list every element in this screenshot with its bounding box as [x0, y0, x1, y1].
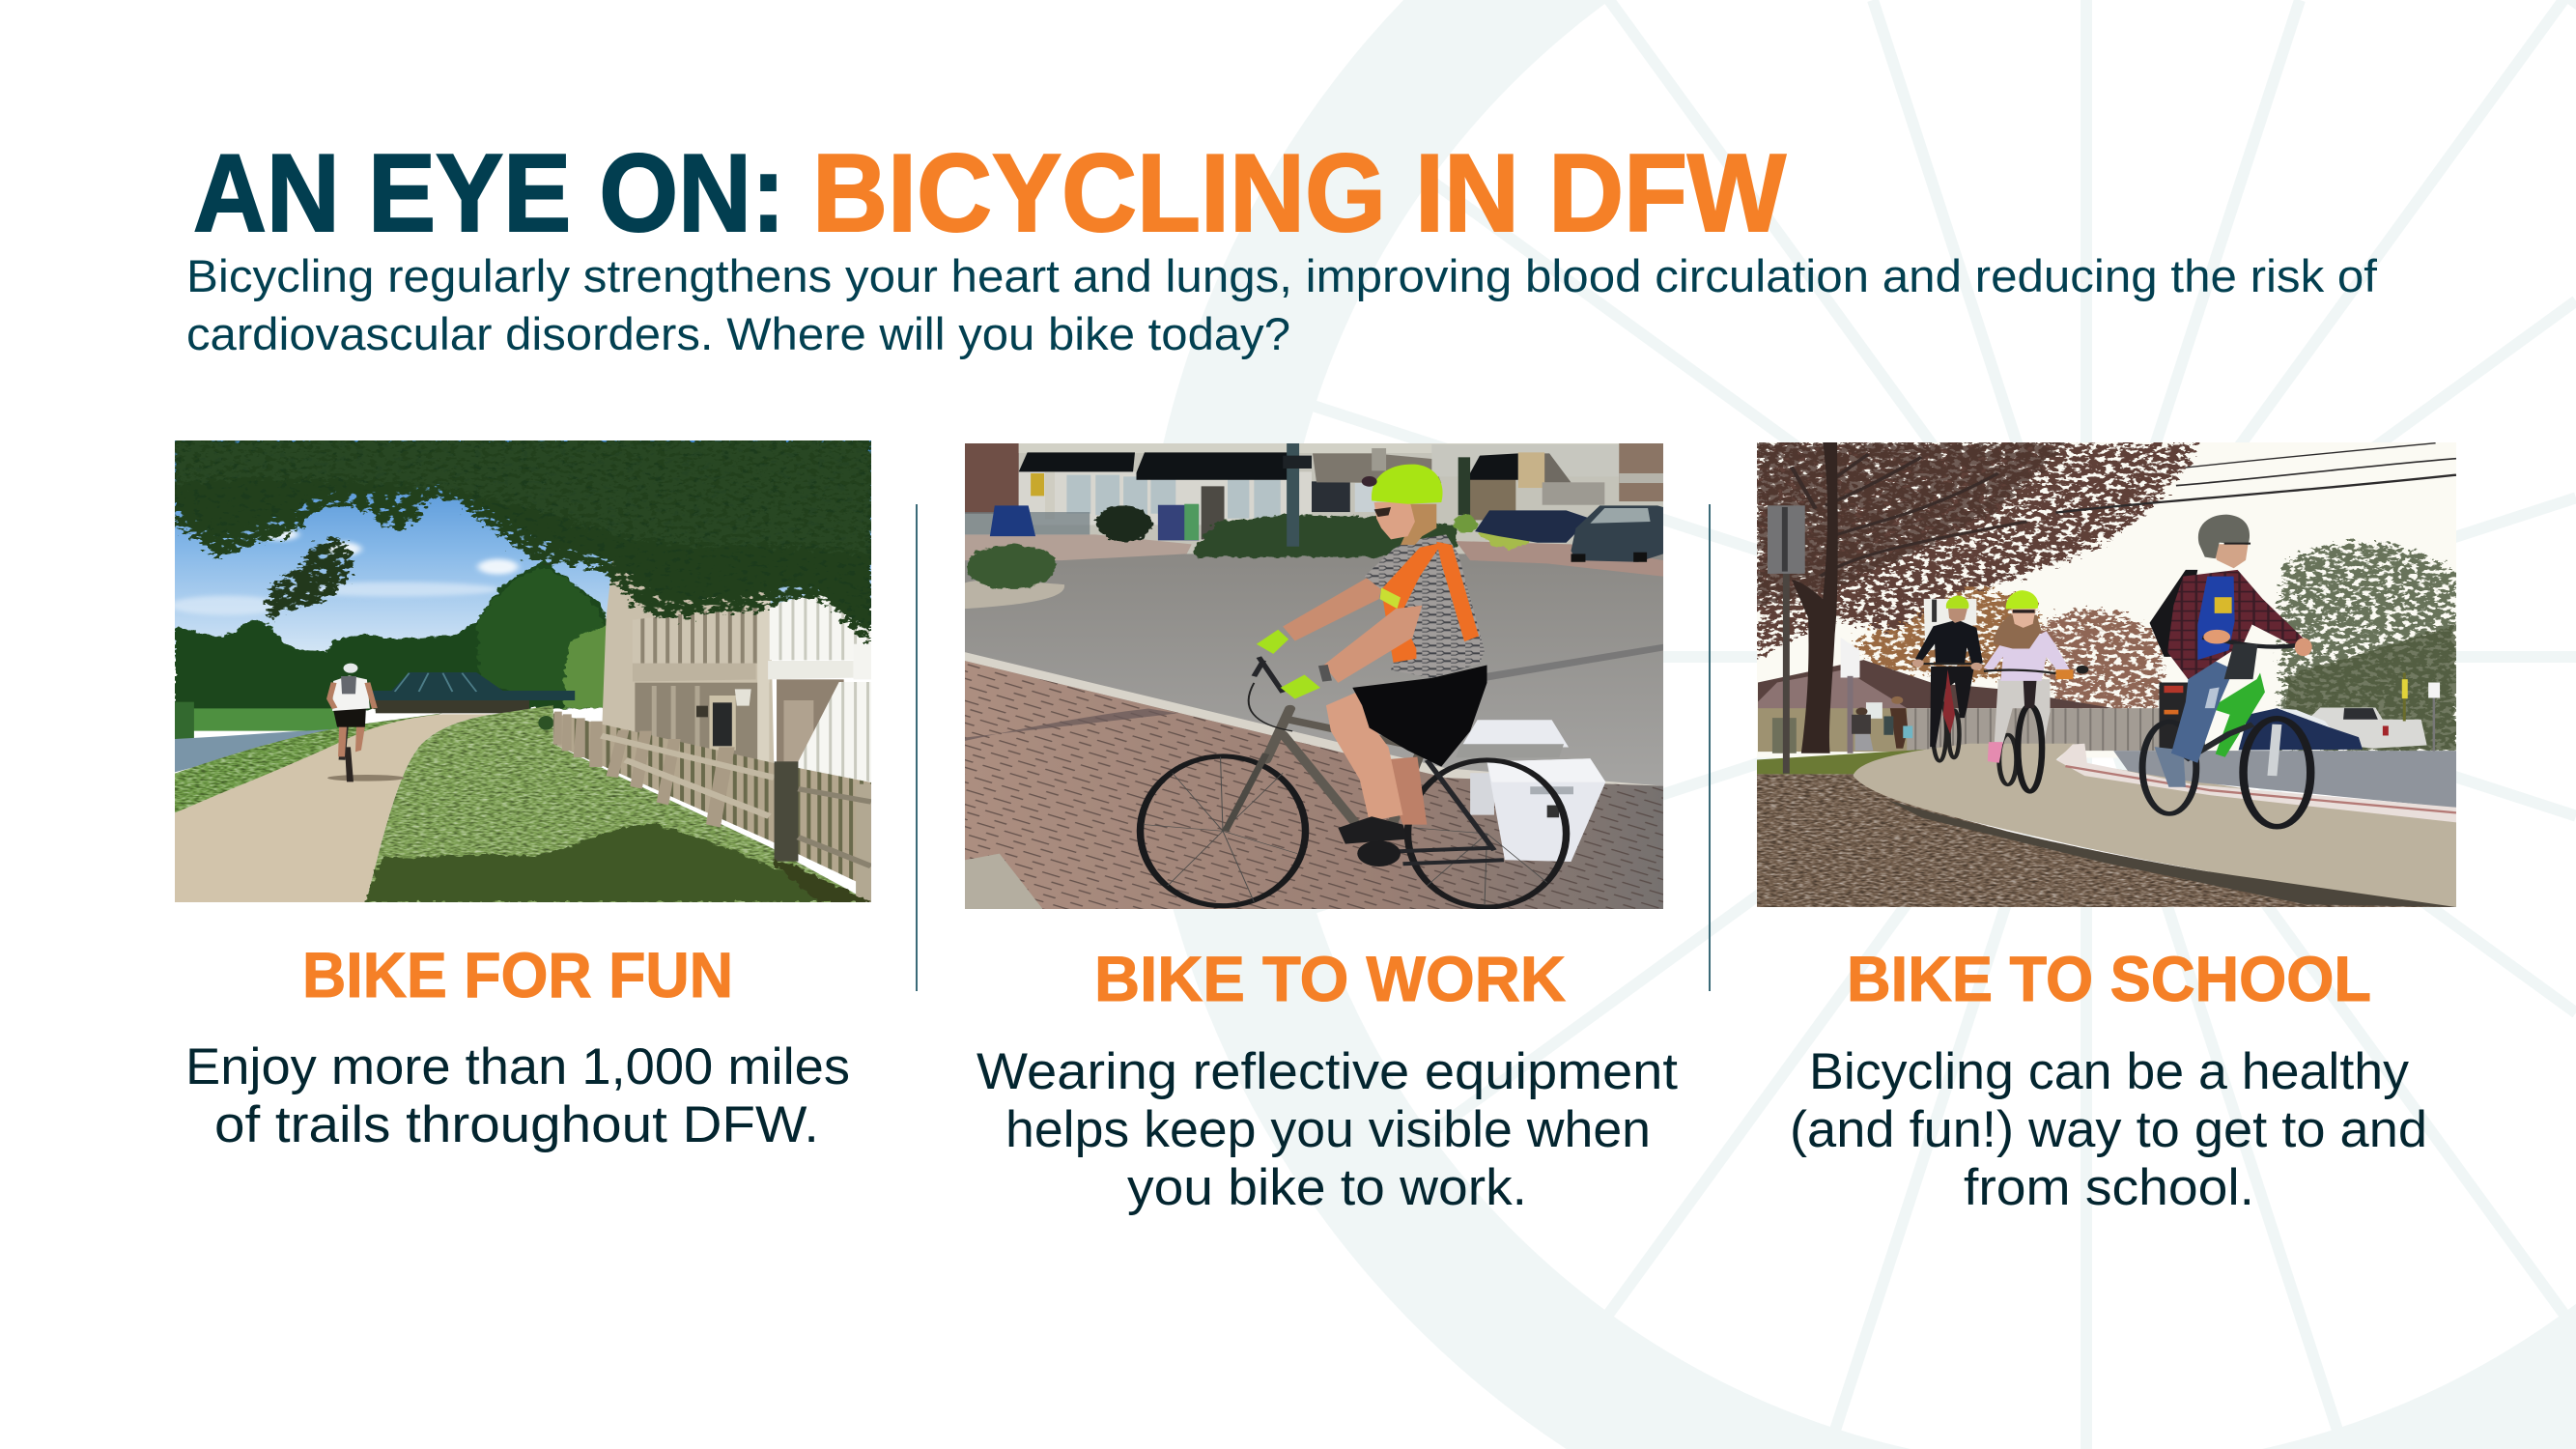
- sub-element: adult rider: [1911, 596, 1983, 761]
- panel: bike for fun: [185, 939, 850, 1153]
- body: bike to work: Wearing reflective equipment: [977, 1043, 1678, 1100]
- divider right: [1709, 504, 1711, 991]
- sub-element: rider on trail: [327, 664, 405, 781]
- heading: bike to work: BIKE TO WORK: [1094, 943, 1566, 1014]
- divider left: [916, 504, 918, 991]
- sub-element: bicycle: [1140, 657, 1567, 907]
- photo: family biking to school: [1757, 442, 2456, 907]
- sub-element: distant pedestrians: [1852, 696, 1912, 751]
- heading: bike to school: BIKE TO SCHOOL: [1847, 943, 2371, 1014]
- title: AN EYE ON:: [193, 132, 785, 255]
- sub-element: girl rider: [1984, 590, 2088, 791]
- intro text: Bicycling regularly strengthens your heart and lungs, improving blood circulation and reducing the risk of: [186, 250, 2378, 301]
- body: bike to school: Bicycling can be a healthy: [1809, 1043, 2410, 1100]
- sub-element: street signs: [1768, 505, 1976, 774]
- body: bike to school: from school.: [1964, 1159, 2254, 1216]
- title: [193, 132, 1786, 255]
- photo: commuter on bike in downtown street: [965, 443, 1663, 909]
- photo: cyclist on riverside trail: [175, 440, 871, 902]
- body: bike to school: [1790, 1043, 2427, 1216]
- body: bike to school: (and fun!) way to get to and: [1790, 1101, 2427, 1158]
- panel: bike to work: [977, 943, 1678, 1216]
- body: bike for fun: [185, 1038, 850, 1153]
- heading: bike for fun: BIKE FOR FUN: [302, 939, 733, 1010]
- sub-element: rear cargo boxes: [1456, 720, 1605, 862]
- body: bike to work: [977, 1043, 1678, 1216]
- panel: bike to school: [1790, 943, 2427, 1216]
- sub-element: parked vehicles: [2159, 673, 2440, 751]
- sub-element: boy rider in front: [2142, 515, 2312, 827]
- intro text: cardiovascular disorders. Where will you bike today?: [186, 308, 1290, 359]
- title: BICYCLING IN DFW: [812, 132, 1786, 255]
- body: bike to work: you bike to work.: [1127, 1159, 1527, 1216]
- intro text: [186, 250, 2378, 359]
- sub-element: rider with helmet and vest: [1257, 465, 1487, 844]
- body: bike to work: helps keep you visible when: [1005, 1101, 1651, 1158]
- body: bike for fun: of trails throughout DFW.: [214, 1096, 819, 1153]
- body: bike for fun: Enjoy more than 1,000 miles: [185, 1038, 850, 1095]
